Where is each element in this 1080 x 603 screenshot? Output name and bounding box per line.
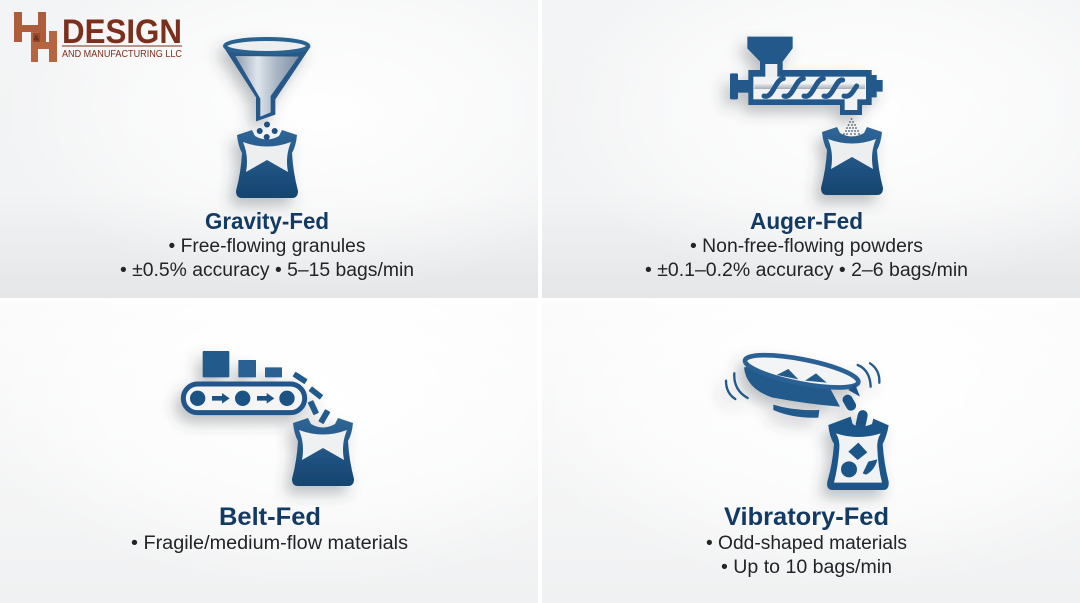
icon: falling granules (257, 122, 278, 140)
icon: funnel (223, 39, 311, 121)
icon: bag with odd shapes, vibratory-fed (827, 417, 889, 490)
text: gravity-fed line 1: • Free-flowing granules (168, 236, 366, 257)
title: Vibratory-Fed: Vibratory-Fed (724, 503, 889, 531)
title: Gravity-Fed: Gravity-Fed (205, 208, 329, 234)
panel: auger-fed background (542, 0, 1080, 298)
panel: gravity-fed background (0, 0, 538, 298)
icon: bag, auger-fed (821, 127, 883, 195)
icon: conveyor belt with boxes (183, 351, 330, 424)
icon: bag, gravity-fed (236, 130, 298, 198)
text: auger-fed line 2: • ±0.1–0.2% accuracy • 2–6 bags/min (645, 260, 968, 281)
icon: bag, belt-fed (292, 418, 354, 486)
text: auger-fed line 1: • Non-free-flowing powders (690, 236, 923, 257)
text: gravity-fed line 2: • ±0.5% accuracy • 5–15 bags/min (120, 260, 414, 281)
icon: auger screw conveyor (730, 37, 883, 115)
text: vibratory-fed line 2: • Up to 10 bags/min (721, 557, 892, 578)
icon: powder stream (842, 118, 860, 138)
logo: H&H Design and Manufacturing LLC: & (34, 34, 40, 42)
title: Belt-Fed: Belt-Fed (219, 503, 321, 531)
text: vibratory-fed line 1: • Odd-shaped materials (706, 533, 907, 554)
panel: belt-fed background (0, 302, 538, 603)
logo: H&H Design and Manufacturing LLC: AND MANUFACTURING LLC (62, 49, 182, 60)
title: Auger-Fed: Auger-Fed (750, 208, 863, 234)
icon: vibratory bowl (726, 349, 879, 431)
text: belt-fed line 1: • Fragile/medium-flow materials (131, 533, 408, 554)
logo: H&H Design and Manufacturing LLC (14, 12, 182, 62)
panel: vibratory-fed background (542, 302, 1080, 603)
logo: H&H Design and Manufacturing LLC: DESIGN (62, 13, 182, 51)
